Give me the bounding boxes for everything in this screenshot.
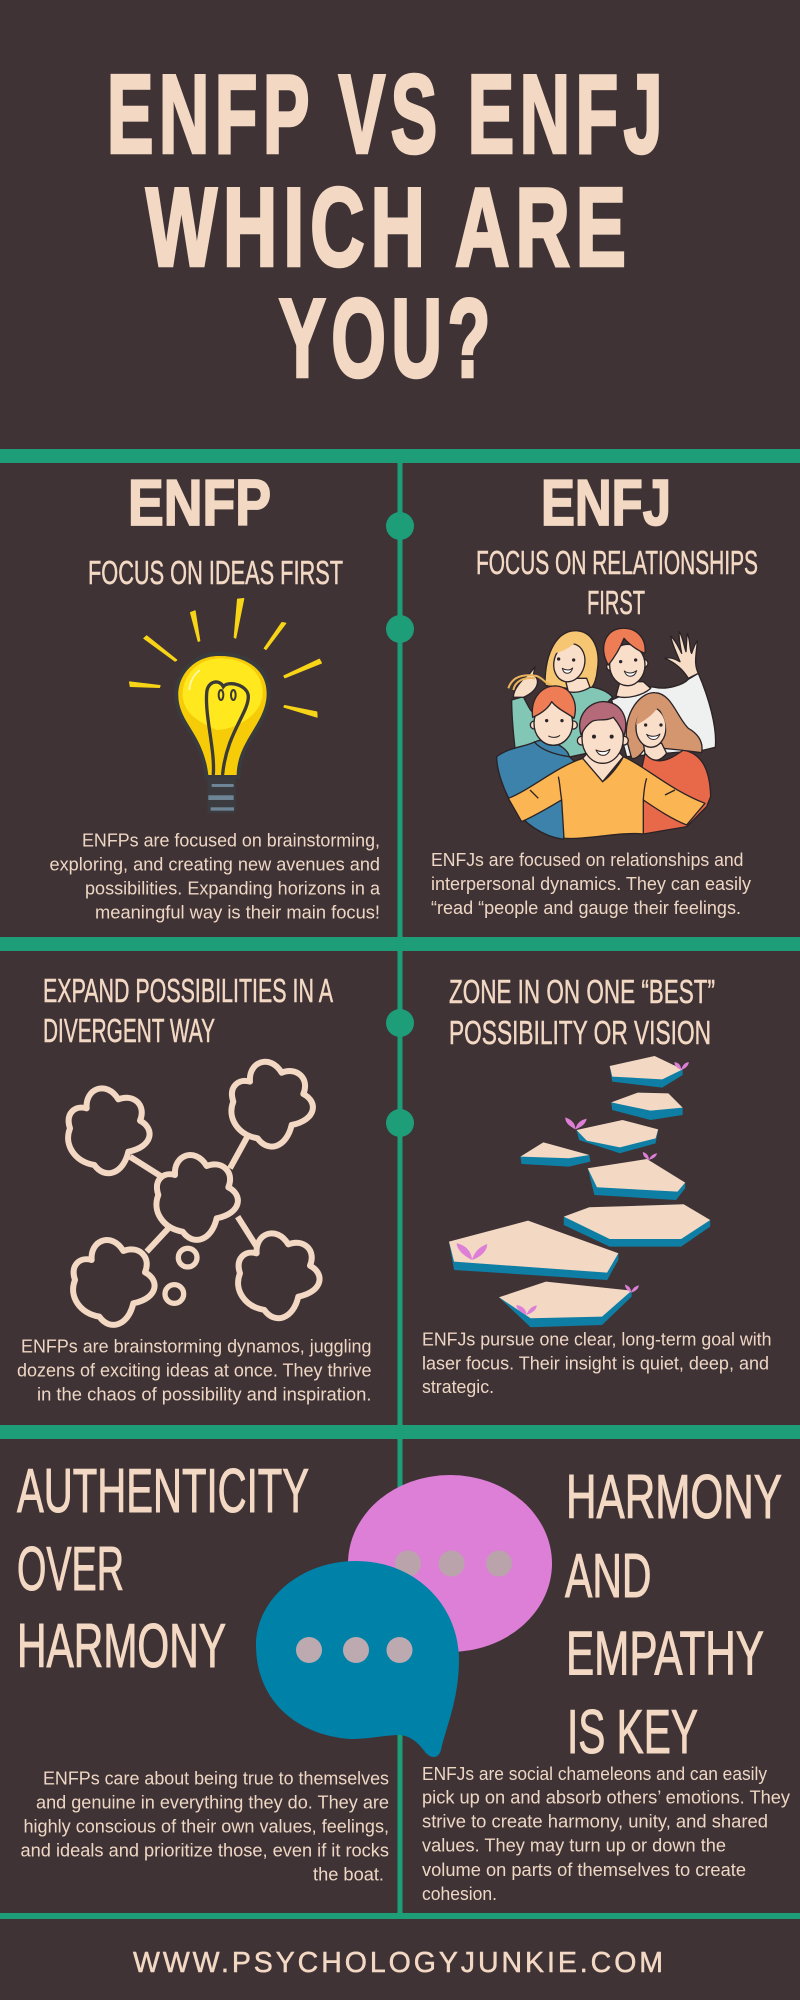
front man face: [583, 750, 623, 782]
title: YOU?: [279, 276, 496, 400]
text: ENFJ chameleons: strive to create harmony, unity, and shared: [422, 1812, 768, 1832]
subheading: focus on relationships first: [476, 544, 758, 621]
text: ENFJ laser focus: [422, 1329, 772, 1397]
red sweater woman: [640, 750, 711, 834]
text: ENFJ chameleons: values. They may turn up or down the: [422, 1836, 726, 1856]
heading: authenticity over harmony: HARMONY: [17, 1612, 226, 1681]
text: ENFP authenticity: [20, 1768, 389, 1885]
text: ENFP dynamos: ENFPs are brainstorming dynamos, juggling: [21, 1337, 372, 1357]
icon: stepping stones: [449, 1056, 710, 1327]
redhead man: [616, 682, 651, 697]
text: ENFJ laser focus: laser focus. Their insight is quiet, deep, and: [422, 1353, 769, 1373]
subheading: expand possibilities: [43, 972, 333, 1049]
title: [107, 52, 668, 400]
subheading: expand possibilities: EXPAND POSSIBILITIES IN A: [43, 972, 333, 1009]
text: ENFP authenticity: the boat.: [313, 1865, 384, 1885]
text: ENFP dynamos: [17, 1337, 372, 1404]
icon: blue speech bubble: [256, 1561, 459, 1757]
white sweater: [612, 673, 716, 757]
illustration: group of friends: [497, 628, 716, 839]
text: ENFP dynamos: dozens of exciting ideas at once. They thrive: [17, 1361, 372, 1381]
text: ENFP authenticity: and ideals and prioritize those, even if it rocks: [20, 1840, 389, 1860]
text: ENFP authenticity: and genuine in everything they do. They are: [36, 1792, 389, 1812]
waving hand: [665, 632, 698, 678]
text: ENFJ relationships: interpersonal dynamics. They can easily: [431, 874, 751, 894]
text: ENFJ relationships: [431, 850, 751, 918]
text: ENFJ chameleons: cohesion.: [422, 1884, 497, 1904]
text: ENFJ laser focus: ENFJs pursue one clear, long-term goal with: [422, 1329, 772, 1349]
text: ENFJ relationships: ENFJs are focused on relationships and: [431, 850, 744, 870]
blue sweater man: [497, 742, 580, 839]
subheading: zone in: [449, 973, 715, 1051]
icon: light bulb: [130, 599, 321, 813]
timeline dividers: [0, 449, 800, 1919]
heading: harmony and empathy is key: AND: [565, 1542, 652, 1611]
text: ENFP dynamos: in the chaos of possibility and inspiration.: [37, 1384, 372, 1404]
front man yellow sweater: [508, 757, 705, 839]
text: ENFP ideas: ENFPs are focused on brainstorming,: [82, 830, 380, 850]
text: ENFJ relationships: “read “people and gauge their feelings.: [431, 898, 741, 918]
heading: authenticity over harmony: OVER: [17, 1535, 124, 1604]
subheading: focus on relationships first: FIRST: [587, 584, 645, 621]
text: ENFP ideas: meaningful way is their main focus!: [95, 902, 380, 922]
text: ENFP authenticity: ENFPs care about being true to themselves: [43, 1768, 389, 1788]
subheading: focus on ideas first: FOCUS ON IDEAS FIRST: [88, 554, 343, 591]
icon: cloud network: [68, 1062, 320, 1325]
blonde woman: [545, 631, 598, 688]
faces details: [545, 657, 663, 739]
hand and hair lock: [513, 667, 537, 697]
heading: ENFP: ENFP: [128, 466, 271, 539]
text: ENFP ideas: exploring, and creating new avenues and: [50, 854, 380, 874]
heading: harmony and empathy is key: IS KEY: [567, 1698, 698, 1767]
text: ENFJ laser focus: strategic.: [422, 1377, 494, 1397]
text: ENFP ideas: possibilities. Expanding horizons in a: [85, 878, 381, 898]
heading: harmony and empathy is key: [565, 1463, 782, 1767]
text: ENFP ideas: [50, 830, 381, 922]
text: ENFP authenticity: highly conscious of their own values, feelings,: [24, 1816, 389, 1836]
text: ENFJ chameleons: ENFJs are social chameleons and can easily: [422, 1764, 767, 1784]
icon: pink speech bubble: [348, 1475, 552, 1652]
text: ENFJ chameleons: volume on parts of themselves to create: [422, 1860, 746, 1880]
heading: authenticity over harmony: AUTHENTICITY: [17, 1457, 309, 1526]
text: ENFJ chameleons: pick up on and absorb others’ emotions. They: [422, 1788, 790, 1808]
text: ENFJ chameleons: [422, 1764, 790, 1904]
footer url: WWW.PSYCHOLOGYJUNKIE.COM: [133, 1947, 666, 1979]
teal sweater: [512, 687, 613, 758]
heading: ENFJ: ENFJ: [541, 466, 671, 539]
subheading: expand possibilities: DIVERGENT WAY: [43, 1012, 215, 1049]
heading: authenticity over harmony: [17, 1457, 309, 1681]
